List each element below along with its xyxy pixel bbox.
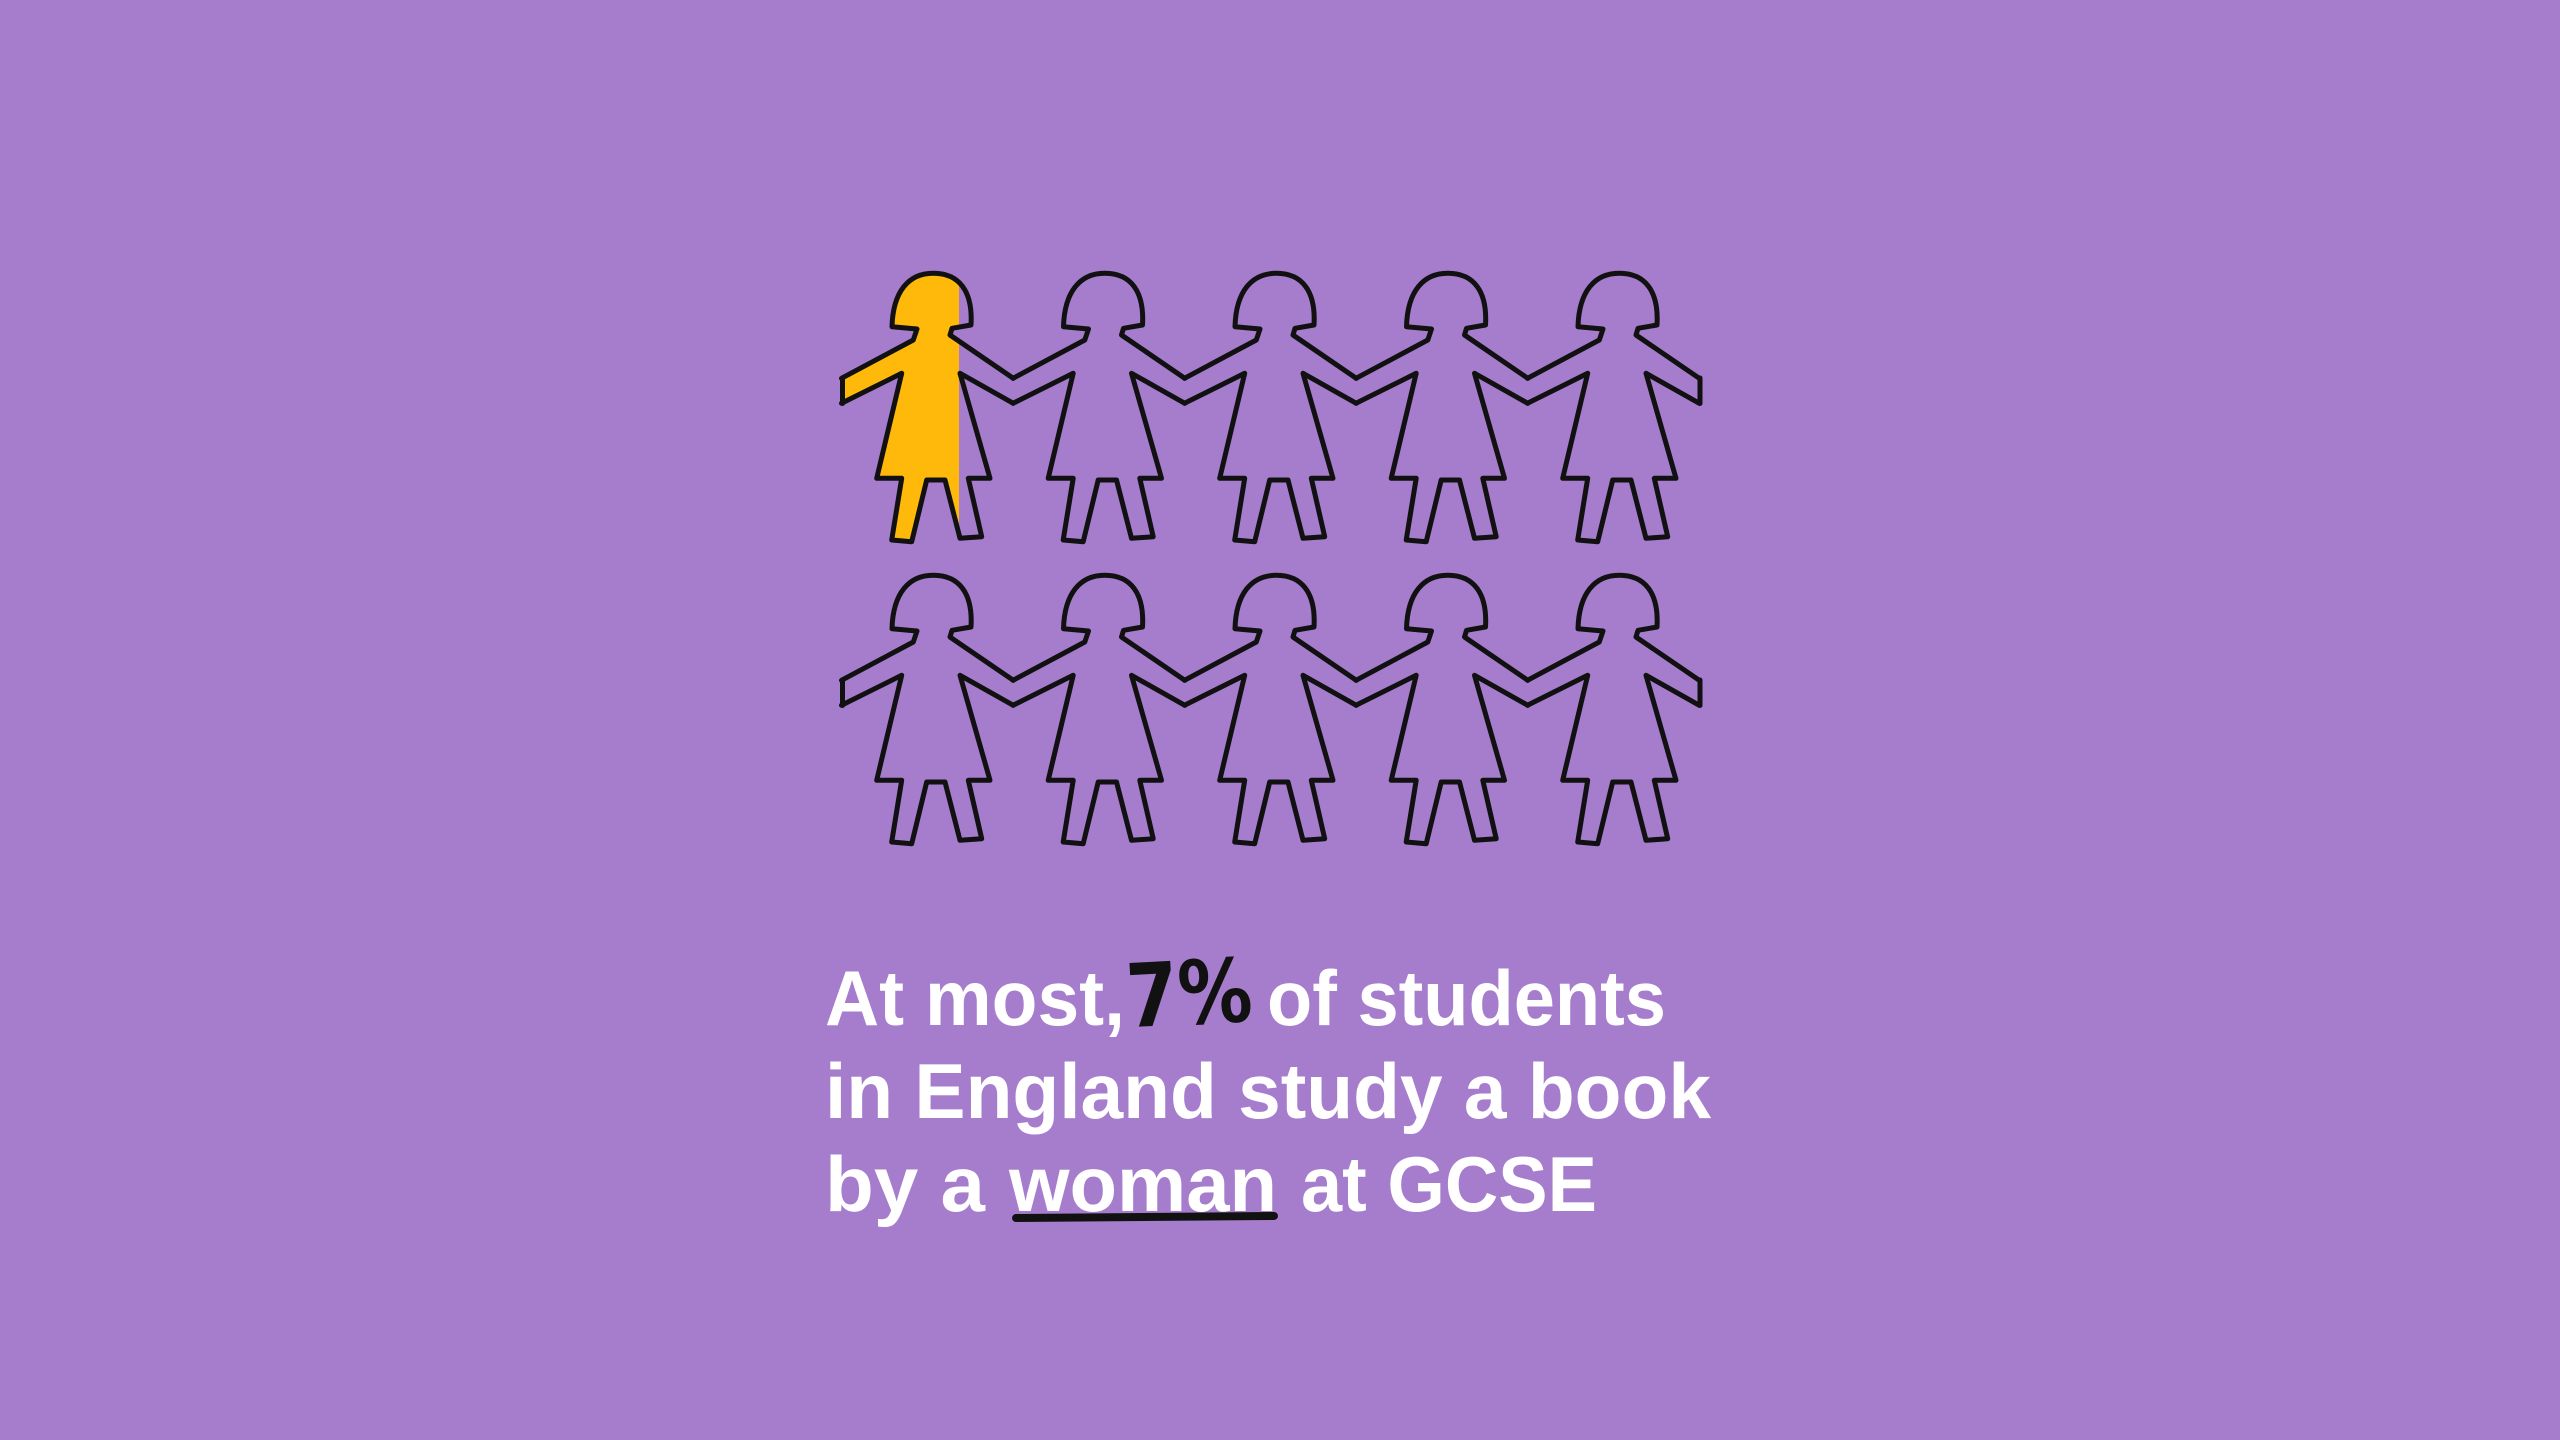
icon: yellow highlighted figure	[842, 273, 1013, 542]
headline text	[825, 954, 1712, 1228]
figures: top row	[842, 273, 1700, 542]
headline text: at GCSE	[1301, 1140, 1597, 1228]
headline text: by a	[825, 1140, 986, 1228]
figures: bottom row	[842, 575, 1700, 844]
headline text: in England study a book	[825, 1047, 1712, 1135]
handwritten 7%: 7%	[1124, 939, 1255, 1048]
headline text: At most,	[825, 954, 1125, 1042]
underline under woman	[1016, 1216, 1274, 1218]
headline text: woman	[1008, 1140, 1277, 1228]
headline text: of students	[1267, 954, 1666, 1042]
